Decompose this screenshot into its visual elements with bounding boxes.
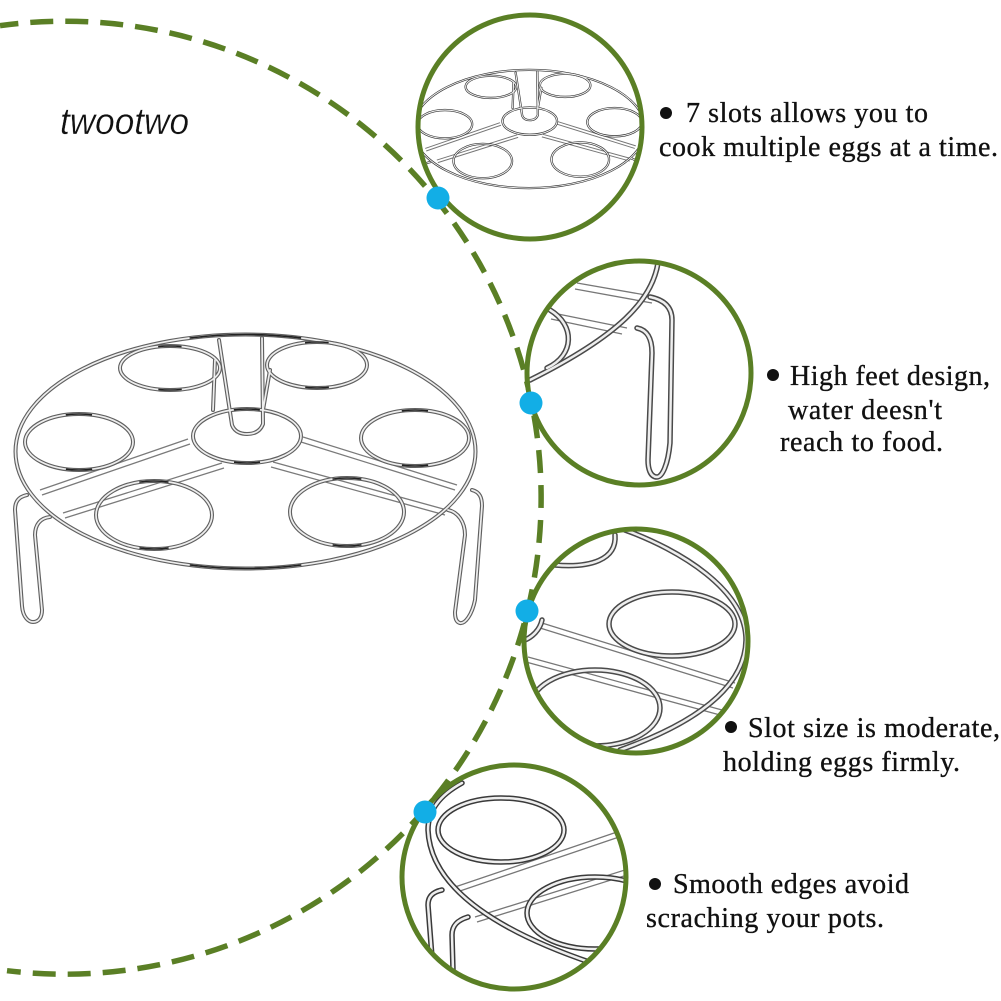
text block: seven slots: 7 slots allows you to (686, 98, 928, 129)
text block: slot size (723, 713, 1000, 778)
text block: smooth edges: Smooth edges avoid (673, 869, 909, 900)
text block: slot size: holding eggs firmly. (723, 747, 960, 778)
text block: high feet: reach to food. (780, 427, 943, 458)
text block: seven slots (659, 98, 998, 163)
detail circle 4: smooth edges (400, 762, 628, 992)
detail circle 3: slot size (524, 529, 748, 753)
text block: high feet: water deesn't (788, 395, 942, 426)
watermark: twootwo: twootwo (60, 101, 189, 142)
text block: slot size: Slot size is moderate, (748, 713, 1000, 744)
text block: smooth edges (646, 869, 909, 934)
text block: high feet (767, 361, 990, 458)
main product image: egg steamer rack (15, 334, 482, 623)
text block: seven slots: cook multiple eggs at a time. (659, 132, 998, 163)
text block: high feet: High feet design, (790, 361, 990, 392)
detail circle 1: seven slots (413, 15, 648, 239)
dashed green arc (0, 21, 541, 974)
detail circle 2: high feet (527, 261, 751, 485)
blue connector dots (414, 186, 542, 824)
text block: smooth edges: scraching your pots. (646, 903, 884, 934)
